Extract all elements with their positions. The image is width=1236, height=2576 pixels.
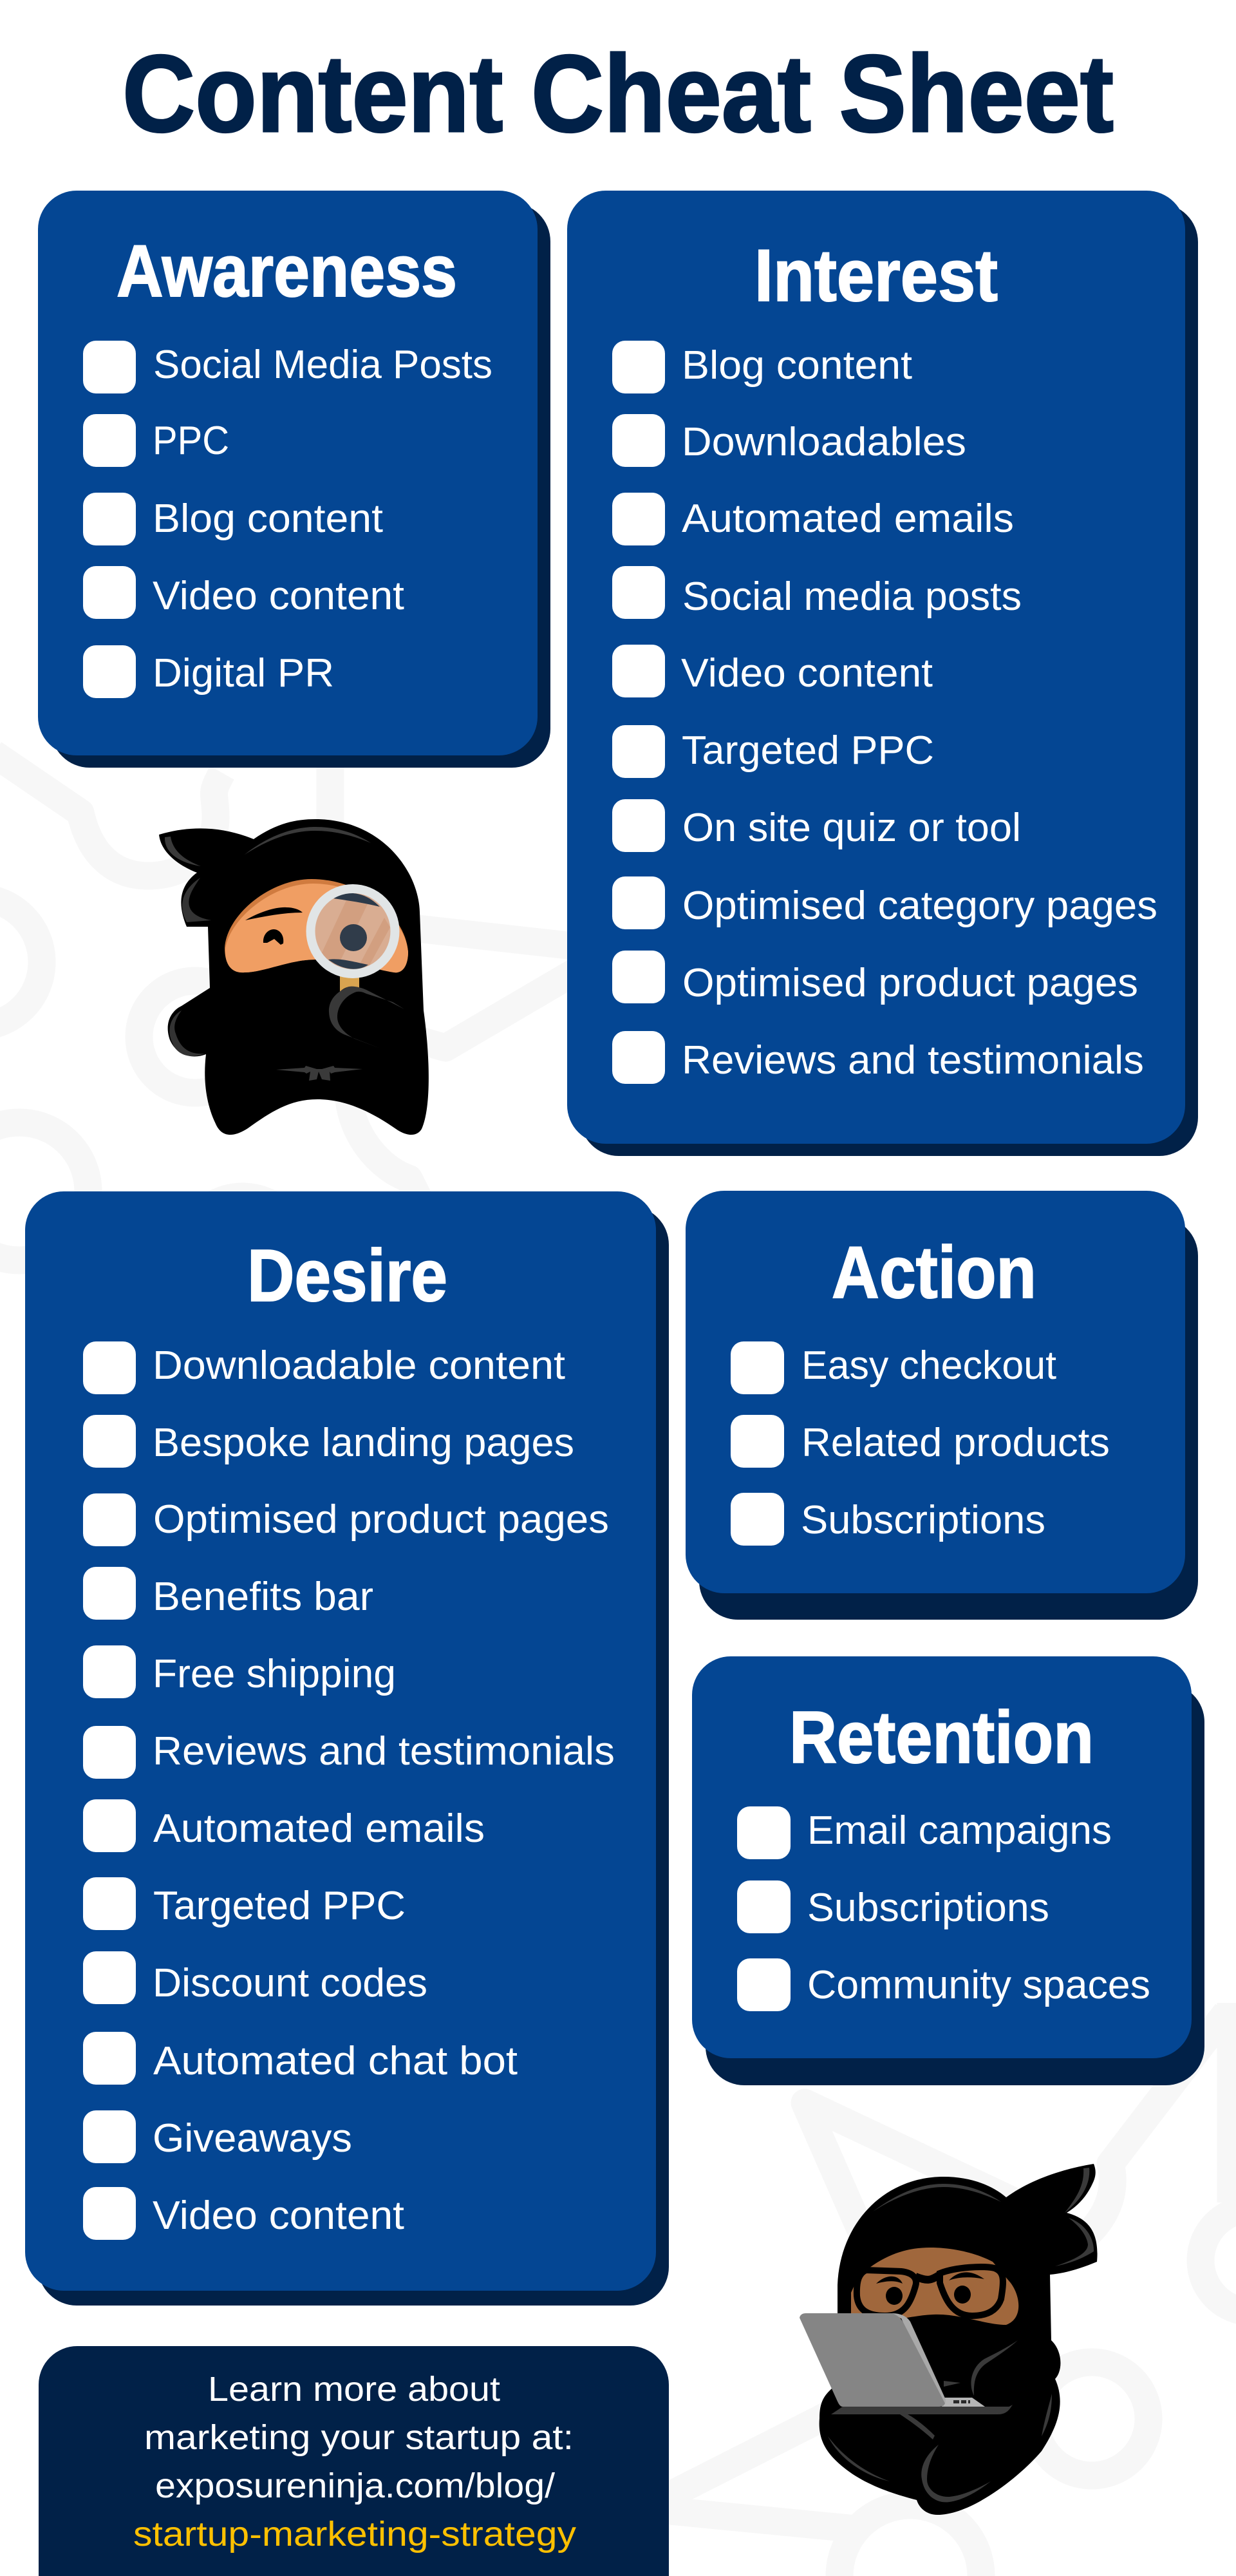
- item: Blog content: Blog content: [682, 343, 912, 388]
- item: Email campaigns: Email campaigns: [807, 1808, 1112, 1853]
- panel: Retention: [692, 1656, 1204, 2085]
- item: Bespoke landing pages: Bespoke landing pages: [153, 1421, 574, 1465]
- item: Related products: Related products: [801, 1421, 1110, 1465]
- heading: Interest: Interest: [754, 235, 998, 317]
- heading: Awareness: Awareness: [117, 231, 457, 312]
- item: Giveaways: Giveaways: [153, 2116, 352, 2161]
- item: Reviews and testimonials: Reviews and testimonials: [682, 1038, 1144, 1083]
- item: Optimised product pages: [612, 951, 1138, 1005]
- item: Video content: Video content: [681, 651, 933, 696]
- footer text: startup-marketing-strategy: [133, 2515, 576, 2553]
- item: Automated chat bot: Automated chat bot: [153, 2039, 518, 2083]
- item: Blog content: [83, 493, 383, 545]
- item: Discount codes: Discount codes: [153, 1961, 427, 2005]
- item: Social Media Posts: Social Media Posts: [153, 343, 492, 387]
- item: Digital PR: Digital PR: [153, 651, 334, 696]
- item: Social media posts: [612, 566, 1022, 619]
- item: Video content: [83, 2187, 404, 2240]
- item: Automated emails: [83, 1799, 485, 1852]
- item: PPC: [83, 414, 229, 467]
- item: Video content: Video content: [153, 2193, 404, 2238]
- footer text: marketing your startup at:: [144, 2418, 574, 2457]
- item: Optimised product pages: Optimised product pages: [682, 961, 1138, 1005]
- panel: Awareness: [38, 191, 550, 768]
- item: Blog content: Blog content: [153, 497, 383, 541]
- panel: Action: [686, 1191, 1198, 1620]
- item: Easy checkout: Easy checkout: [801, 1343, 1056, 1388]
- item: Digital PR: [83, 645, 334, 698]
- item: Email campaigns: [737, 1806, 1112, 1859]
- item: Subscriptions: [737, 1880, 1049, 1933]
- item: On site quiz or tool: [612, 799, 1021, 852]
- item: Benefits bar: Benefits bar: [153, 1575, 373, 1619]
- item: Community spaces: [737, 1958, 1150, 2011]
- item: Downloadables: [612, 414, 966, 467]
- footer text: Learn more about: [208, 2370, 500, 2409]
- item: Automated emails: [612, 493, 1014, 545]
- icon: ninja with magnifying glass: [159, 819, 429, 1135]
- item: Subscriptions: [731, 1493, 1045, 1546]
- item: Downloadables: Downloadables: [682, 420, 966, 464]
- panel: footer call to action: [39, 2346, 669, 2576]
- item: Reviews and testimonials: Reviews and testimonials: [153, 1729, 615, 1774]
- item: Discount codes: [83, 1951, 427, 2005]
- item: On site quiz or tool: On site quiz or tool: [682, 806, 1021, 850]
- footer text: exposureninja.com/blog/: [155, 2467, 555, 2505]
- title: Content Cheat Sheet: [122, 33, 1114, 155]
- item: Automated emails: Automated emails: [153, 1806, 485, 1851]
- item: Automated emails: Automated emails: [682, 497, 1014, 541]
- item: Targeted PPC: [612, 725, 934, 778]
- item: Video content: Video content: [153, 574, 404, 618]
- panel: Interest: [567, 191, 1198, 1156]
- heading: Desire: Desire: [247, 1235, 447, 1317]
- item: Blog content: [612, 341, 912, 393]
- item: Community spaces: Community spaces: [807, 1963, 1150, 2007]
- item: Free shipping: Free shipping: [153, 1652, 396, 1696]
- heading: Retention: Retention: [789, 1697, 1094, 1779]
- item: Benefits bar: [83, 1567, 373, 1620]
- item: Targeted PPC: Targeted PPC: [682, 728, 934, 773]
- item: Social Media Posts: [83, 341, 492, 393]
- item: PPC: PPC: [153, 419, 229, 463]
- item: Subscriptions: Subscriptions: [801, 1498, 1045, 1542]
- item: Targeted PPC: Targeted PPC: [153, 1884, 406, 1928]
- item: Automated chat bot: [83, 2032, 518, 2085]
- item: Downloadable content: Downloadable content: [153, 1343, 565, 1388]
- footer text: [133, 2370, 576, 2553]
- item: Subscriptions: Subscriptions: [807, 1886, 1049, 1930]
- item: Video content: [83, 566, 404, 619]
- item: Optimised category pages: Optimised category pages: [682, 884, 1157, 928]
- icon: ninja with laptop: [800, 2164, 1098, 2515]
- item: Targeted PPC: [83, 1877, 406, 1930]
- item: Giveaways: [83, 2110, 352, 2163]
- heading: Action: Action: [832, 1232, 1036, 1314]
- item: Downloadable content: [83, 1341, 565, 1394]
- item: Free shipping: [83, 1645, 396, 1698]
- panel: Desire: [25, 1191, 669, 2306]
- item: Optimised product pages: Optimised product pages: [153, 1497, 609, 1542]
- item: Social media posts: Social media posts: [682, 574, 1022, 619]
- item: Related products: [731, 1415, 1110, 1468]
- item: Easy checkout: [731, 1341, 1056, 1394]
- item: Video content: [612, 645, 933, 697]
